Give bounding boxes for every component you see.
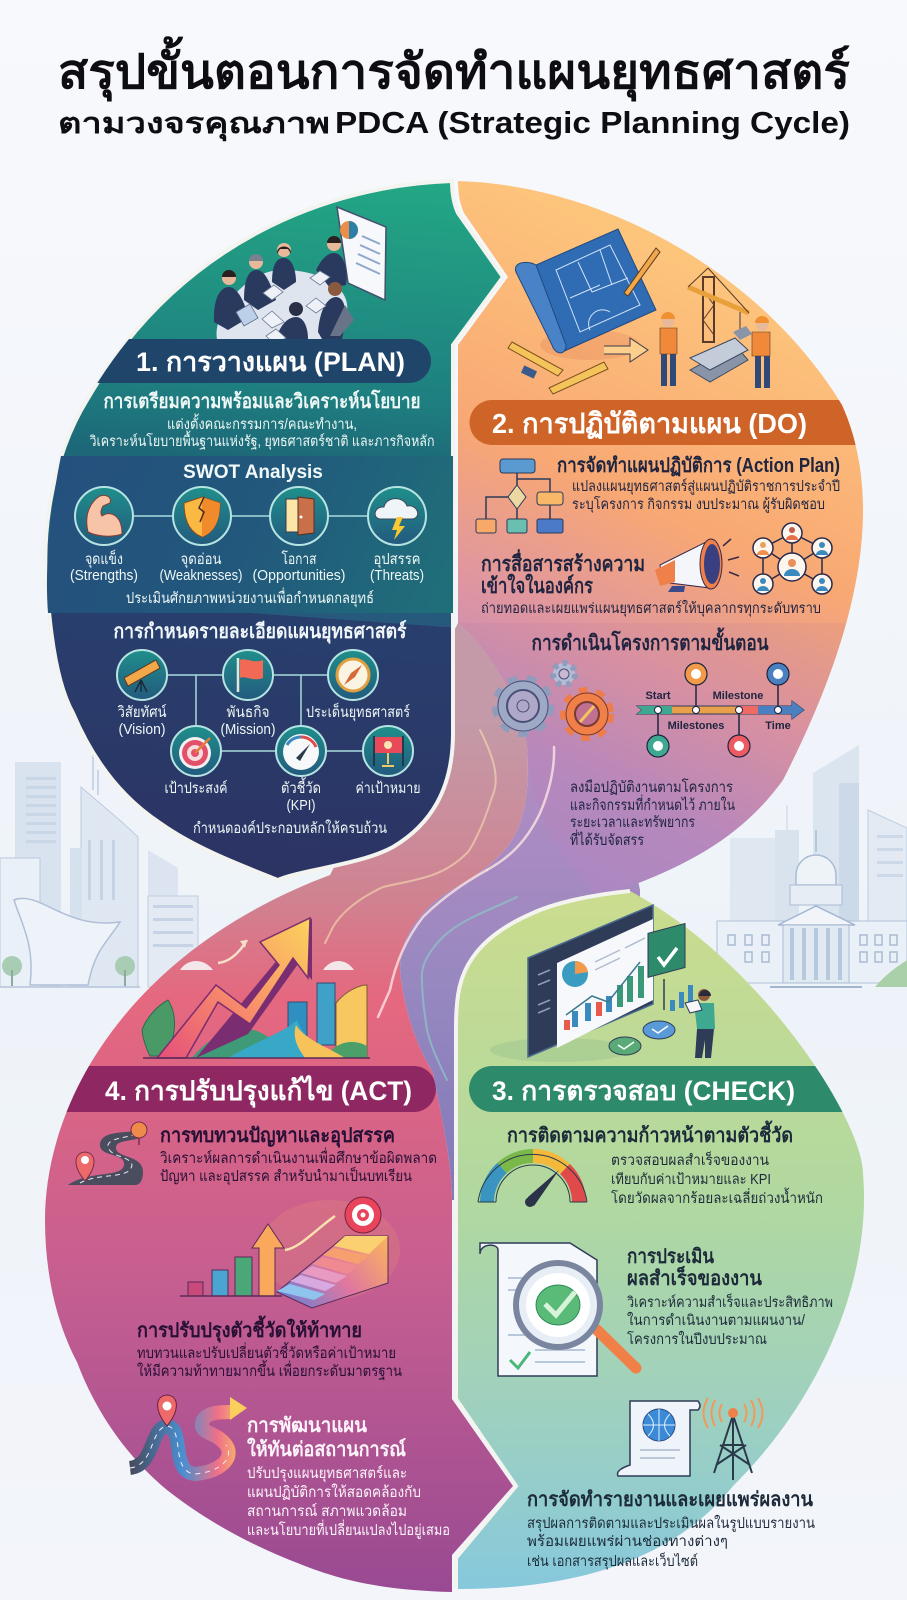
- icon: strengths arm: [75, 487, 133, 545]
- section: SWOT Analysis: SWOT Analysis: [183, 462, 323, 483]
- labels: plan elements: (Vision): [118, 721, 166, 738]
- text block: monitor progress: เทียบกับค่าเป้าหมายและ KPI: [611, 1171, 771, 1188]
- icon: winding path with pin and arrow: [130, 1395, 247, 1474]
- panel: step 4 ACT: [40, 623, 528, 1592]
- labels: SWOT: จุดแข็ง: [85, 549, 123, 569]
- labels: plan elements: (KPI): [286, 797, 316, 814]
- title: [58, 36, 850, 141]
- heading band: CHECK: 3. การตรวจสอบ (CHECK): [492, 1076, 795, 1106]
- icon: KPI gauge: [276, 726, 326, 776]
- text block: prepare and analyse policy: การเตรียมความพร้อมและวิเคราะห์นโยบาย: [104, 389, 420, 413]
- labels: plan elements: [117, 702, 421, 837]
- labels: plan elements: กำหนดองค์ประกอบหลักให้ครบถ้วน: [193, 819, 387, 837]
- text block: report and publish: การจัดทำรายงานและเผยแพร่ผลงาน: [527, 1489, 813, 1511]
- icon: blueprint, tools and construction: [508, 229, 770, 394]
- text block: report and publish: พร้อมเผยแพร่ผ่านช่องทางต่างๆ: [527, 1533, 728, 1550]
- text block: adapt plan: [247, 1415, 450, 1539]
- title: สรุปขั้นตอนการจัดทำแผนยุทธศาสตร์: [58, 36, 850, 102]
- icon: rising arrow with bars and hills: [142, 918, 370, 1058]
- text block: review problems: การทบทวนปัญหาและอุปสรรค: [160, 1125, 395, 1148]
- text block: communication: [481, 548, 821, 617]
- labels: plan elements: ค่าเป้าหมาย: [356, 780, 420, 797]
- heading band: PLAN: 1. การวางแผน (PLAN): [136, 347, 405, 377]
- text block: improve KPI: ทบทวนและปรับเปลี่ยนตัวชี้วัดหรือค่าเป้าหมาย: [137, 1342, 396, 1362]
- icon: gears: [497, 663, 609, 736]
- text block: implementation detail: ระยะเวลาและทรัพยากร: [570, 814, 695, 831]
- text block: monitor progress heading: การติดตามความก้าวหน้าตามตัวชี้วัด: [507, 1120, 793, 1147]
- text block: implementation detail: ที่ได้รับจัดสรร: [570, 829, 644, 849]
- title: ตามวงจรคุณภาพ: [58, 108, 330, 141]
- icon: strategic issues compass: [328, 650, 378, 700]
- text block: action plan: [557, 455, 840, 513]
- text block: review problems: [159, 1125, 437, 1186]
- heading: implement projects: การดำเนินโครงการตามขั้นตอน: [532, 627, 769, 655]
- heading band: CHECK: [469, 1066, 868, 1112]
- icon: people network: [753, 523, 832, 594]
- text block: improve KPI: ให้มีความท้าทายมากขึ้น เพื่อยกระดับมาตรฐาน: [137, 1360, 402, 1380]
- text block: action plan: แปลงแผนยุทธศาสตร์สู่แผนปฏิบัติราชการประจำปี: [572, 478, 840, 495]
- icon: bars and stairs to target: [180, 1197, 400, 1308]
- text block: action plan: การจัดทำแผนปฏิบัติการ (Action Plan): [557, 455, 840, 477]
- text block: improve KPI: [137, 1315, 402, 1380]
- labels: SWOT: โอกาส: [282, 550, 316, 568]
- panel: step 3 CHECK: [456, 891, 868, 1589]
- heading band: ACT: [40, 1066, 436, 1112]
- labels: plan elements: เป้าประสงค์: [164, 780, 228, 797]
- skyline: right city with capitol: [717, 745, 907, 987]
- labels: SWOT: (Weaknesses): [160, 567, 242, 584]
- text block: review problems: วิเคราะห์ผลการดำเนินงานเพื่อศึกษาข้อผิดพลาด: [159, 1147, 437, 1167]
- text block: report and publish: สรุปผลการติดตามและประเมินผลในรูปแบบรายงาน: [527, 1514, 815, 1532]
- icon: threats storm: [368, 487, 426, 545]
- text block: monitor progress: [611, 1150, 823, 1207]
- text block: adapt plan: ให้ทันต่อสถานการณ์: [247, 1437, 406, 1461]
- panel: step 2 DO: [458, 181, 868, 903]
- labels: plan elements: (Mission): [220, 721, 276, 738]
- text block: prepare and analyse policy: แต่งตั้งคณะกรรมการ/คณะทำงาน,: [167, 413, 357, 433]
- icon: KPI gauge: [478, 1154, 587, 1207]
- icon: goal target: [171, 726, 221, 776]
- labels: SWOT: (Threats): [370, 567, 424, 584]
- labels: SWOT: (Strengths): [70, 567, 138, 584]
- text block: action plan: ระบุโครงการ กิจกรรม งบประมาณ ผู้รับผิดชอบ: [572, 495, 825, 513]
- icon: mission flag: [223, 650, 273, 700]
- text block: evaluate performance: ผลสำเร็จของงาน: [627, 1265, 762, 1290]
- text block: evaluate performance: โครงการในปีงบประมาณ: [627, 1330, 767, 1348]
- text block: adapt plan: สถานการณ์ สภาพแวดล้อม: [247, 1503, 407, 1520]
- text block: prepare and analyse policy: [90, 389, 434, 450]
- text block: adapt plan: แผนปฏิบัติการให้สอดคล้องกับ: [247, 1483, 421, 1501]
- skyline: left city: [0, 745, 198, 987]
- text block: improve KPI: การปรับปรุงตัวชี้วัดให้ท้าทาย: [137, 1315, 362, 1343]
- heading band: DO: 2. การปฏิบัติตามแผน (DO): [492, 408, 807, 440]
- text block: prepare and analyse policy: วิเคราะห์นโยบายพื้นฐานแห่งรัฐ, ยุทธศาสตร์ชาติ และภารกิจหลัก: [90, 430, 434, 450]
- chart: project timeline: Time: [765, 720, 791, 732]
- icon: document with magnifier: [480, 1243, 636, 1376]
- section: SWOT Analysis: [70, 462, 426, 608]
- labels: SWOT: อุปสรรค: [374, 551, 420, 569]
- section: strategic plan details: การกำหนดรายละเอียดแผนยุทธศาสตร์: [114, 620, 407, 644]
- chart: project timeline: [637, 663, 804, 757]
- labels: SWOT: [70, 549, 424, 608]
- icon: report and broadcast tower: [618, 1398, 762, 1480]
- heading band: PLAN: [60, 339, 431, 383]
- text block: communication: เข้าใจในองค์กร: [481, 573, 594, 598]
- text block: evaluate performance: การประเมิน: [627, 1246, 714, 1268]
- text block: adapt plan: การพัฒนาแผน: [247, 1415, 367, 1437]
- chart: project timeline: Milestone: [713, 690, 763, 702]
- text block: monitor progress: โดยวัดผลจากร้อยละเฉลี่ยถ่วงน้ำหนัก: [611, 1187, 823, 1207]
- heading band: DO: [470, 400, 868, 445]
- icon: megaphone: [655, 539, 739, 592]
- labels: plan elements: วิสัยทัศน์: [117, 704, 167, 721]
- text block: evaluate performance: วิเคราะห์ความสำเร็จและประสิทธิภาพ: [627, 1292, 833, 1311]
- text block: evaluate performance: [627, 1246, 833, 1348]
- chart: project timeline: Start: [645, 690, 671, 702]
- icon: weaknesses shield: [173, 487, 231, 545]
- panel: step 1 PLAN: [45, 181, 503, 880]
- icon: vision telescope: [117, 650, 167, 700]
- title: PDCA (Strategic Planning Cycle): [335, 105, 850, 140]
- text block: evaluate performance: ในการดำเนินงานตามแผนงาน/: [627, 1311, 806, 1329]
- text block: adapt plan: ปรับปรุงแผนยุทธศาสตร์และ: [247, 1465, 407, 1483]
- text block: communication: การสื่อสารสร้างความ: [481, 548, 645, 576]
- chart: project timeline: Milestones: [668, 720, 724, 732]
- text block: communication: ถ่ายทอดและเผยแพร่แผนยุทธศาสตร์ให้บุคลากรทุกระดับทราบ: [481, 599, 821, 617]
- text block: implementation detail: ลงมือปฏิบัติงานตามโครงการ: [570, 778, 733, 796]
- labels: plan elements: ประเด็นยุทธศาสตร์: [306, 702, 410, 722]
- icon: dashboard and reviewer: [490, 905, 715, 1062]
- labels: SWOT: จุดอ่อน: [180, 551, 222, 569]
- text block: report and publish: [527, 1489, 815, 1570]
- text block: implementation detail: และกิจกรรมที่กำหนดไว้ ภายใน: [570, 794, 735, 814]
- ribbon: flowing purple connector: [325, 623, 640, 1200]
- icon: winding road with pins: [68, 1122, 147, 1185]
- text block: monitor progress: ตรวจสอบผลสำเร็จของงาน: [611, 1150, 769, 1169]
- heading band: ACT: 4. การปรับปรุงแก้ไข (ACT): [105, 1075, 412, 1108]
- section: strategic plan details: [114, 620, 420, 837]
- labels: plan elements: ตัวชี้วัด: [281, 777, 321, 797]
- labels: SWOT: (Opportunities): [252, 567, 346, 584]
- icon: flowchart: [476, 459, 563, 533]
- text block: report and publish: เช่น เอกสารสรุปผลและเว็บไซต์: [527, 1551, 698, 1570]
- icon: meeting around table: [214, 207, 386, 344]
- icon: target value sign: [363, 726, 413, 776]
- text block: adapt plan: และนโยบายที่เปลี่ยนแปลงไปอยู่เสมอ: [247, 1519, 450, 1539]
- labels: plan elements: พันธกิจ: [226, 704, 270, 721]
- text block: review problems: ปัญหา และอุปสรรค สำหรับนำมาเป็นบทเรียน: [160, 1166, 412, 1186]
- labels: SWOT: ประเมินศักยภาพหน่วยงานเพื่อกำหนดกลยุทธ์: [126, 587, 374, 608]
- text block: implementation detail: [570, 778, 735, 849]
- icon: opportunities door: [270, 487, 328, 545]
